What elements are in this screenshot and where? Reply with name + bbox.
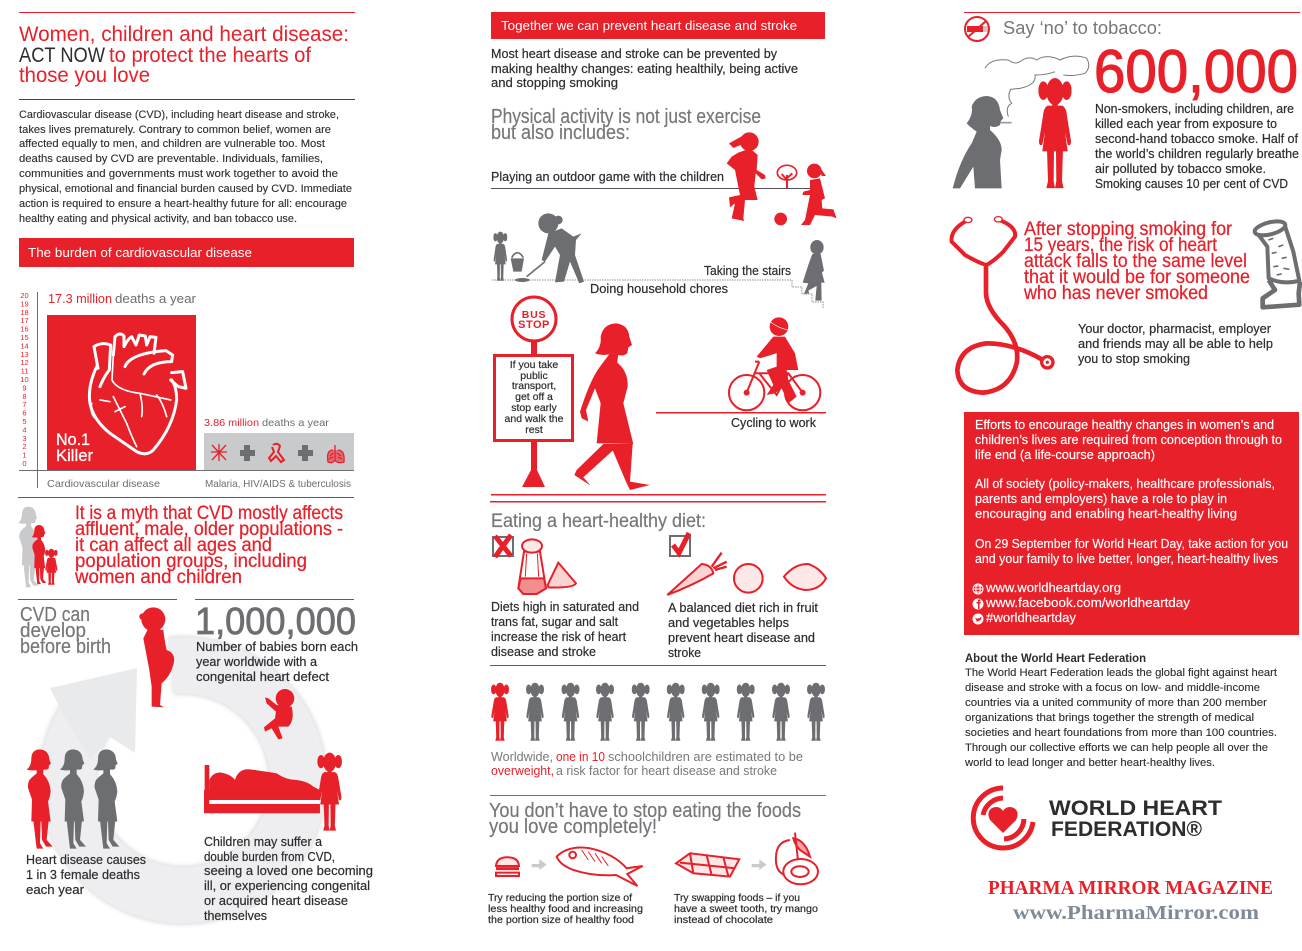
text block: children double burden: ill, or experiencing congenital	[204, 879, 370, 893]
chart axis numbers: 0	[22, 459, 27, 468]
activity: household chores: Doing household chores	[590, 282, 728, 296]
title	[19, 12, 355, 100]
text block: about the World Heart Federation	[964, 653, 1277, 769]
statistic: 1,000,000 babies: 1,000,000	[195, 601, 356, 643]
chart axis numbers: 15	[20, 333, 29, 342]
text block: heart disease causes: each year	[26, 883, 84, 897]
chart axis numbers: 14	[20, 341, 29, 350]
text block: second-hand smoke: air polluted by tobacco smoke.	[1095, 162, 1266, 176]
figures: three women, one in three	[27, 749, 119, 849]
activity: cycling to work: Cycling to work	[731, 416, 817, 430]
statistic: 1,000,000 babies: Number of babies born each	[196, 640, 358, 654]
banner: together we can prevent: Together we can prevent heart disease and stroke	[501, 18, 797, 33]
chart axis numbers: 9	[22, 383, 27, 392]
text block: prevention intro: Most heart disease and stroke can be prevented by	[491, 47, 778, 61]
chart axis numbers: 5	[22, 417, 27, 426]
text block: balanced diet	[668, 601, 819, 660]
callout: after stopping smoking	[1023, 219, 1250, 304]
bar: cardiovascular disease: Killer	[56, 446, 93, 465]
text block: children double burden: or acquired heart disease	[204, 894, 348, 908]
activity: household chores	[492, 213, 792, 296]
text block: swap foods	[674, 892, 818, 926]
text block: about the World Heart Federation: organizations that brings together the strength of medical	[965, 712, 1254, 724]
callout: walk the rest: stop early	[511, 402, 558, 414]
text block: introduction: takes lives prematurely. Contrary to common belief, women are	[19, 124, 331, 136]
icon: bus stop sign: STOP	[518, 319, 550, 331]
chart axis numbers	[20, 291, 29, 468]
icon: plus	[240, 445, 255, 461]
callout: after stopping smoking: 15 years, the risk of heart	[1024, 235, 1218, 256]
text block: overweight schoolchildren: a risk factor for heart disease and stroke	[556, 764, 777, 778]
panel: call to action: children’s lives are required from conception through to	[975, 433, 1282, 447]
panel: middle column	[488, 12, 837, 926]
chart axis numbers: 17	[20, 316, 29, 325]
text block: about the World Heart Federation: disease and stroke with a focus on low- and middle-income	[965, 682, 1260, 694]
icon: bed	[204, 765, 323, 813]
text block: diets high in fat: trans fat, sugar and salt	[491, 615, 618, 629]
text block: ask for help: and friends may all be able to help	[1078, 337, 1273, 351]
text block: diets high in fat: Diets high in saturated and	[491, 600, 639, 614]
icon: second-hand smoke	[953, 56, 1089, 188]
axis labels: Cardiovascular disease	[47, 478, 160, 490]
heading: eating a heart-healthy diet: Eating a heart-healthy diet:	[491, 511, 706, 532]
text block: reduce portions: less healthy food and increasing	[488, 903, 643, 915]
chart axis numbers: 10	[20, 375, 29, 384]
panel: healthy diet	[667, 533, 826, 660]
chart axis numbers: 11	[21, 367, 28, 376]
heading: physical activity: Physical activity is not just exercise	[491, 106, 761, 128]
text block: introduction: affected equally to men, and children are vulnerable too. Most	[19, 138, 325, 150]
callout: walk the rest: get off a	[515, 391, 553, 403]
text block: diets high in fat: increase the risk of heart	[491, 630, 627, 644]
text block: overweight schoolchildren: schoolchildren are estimated to be	[608, 750, 803, 764]
chart axis numbers: 12	[20, 358, 29, 367]
chart axis numbers: 19	[20, 299, 29, 308]
text block: children double burden: double burden from CVD,	[204, 850, 335, 864]
text block: introduction: action is required to ensure a heart-healthy future for all: encourage	[19, 198, 347, 210]
icon: baby	[264, 689, 294, 739]
text block: reduce portions: the portion size of healthy food	[488, 914, 634, 926]
text block: about the World Heart Federation: Through our collective efforts we can help people all over the	[965, 742, 1268, 754]
heading: physical activity: but also includes:	[491, 122, 630, 144]
text block: swap foods: instead of chocolate	[674, 914, 773, 926]
chart axis numbers: 2	[22, 442, 27, 451]
icon: chocolate to mango	[676, 833, 818, 884]
title: Women, children and heart disease:	[19, 23, 349, 46]
chart axis numbers: 20	[20, 291, 29, 300]
chart axis numbers: 3	[22, 434, 27, 443]
banner: the burden of cardiovascular disease	[19, 238, 354, 267]
activity: outdoor game: Playing an outdoor game with the children	[491, 170, 724, 184]
text block: about the World Heart Federation: countries via a united community of more than 200 member	[965, 697, 1267, 709]
activity: cycling to work	[656, 317, 826, 430]
text block: ask for help: you to stop smoking	[1078, 352, 1190, 366]
heading: CVD can develop before birth	[20, 604, 111, 658]
icon: mosquito	[211, 444, 227, 461]
text block: second-hand smoke: the world’s children regularly breathe	[1095, 147, 1299, 161]
callout: CVD myth	[74, 503, 343, 588]
text block: reduce portions	[488, 892, 643, 926]
heading: CVD can develop before birth: CVD can	[20, 604, 90, 626]
text block: about the World Heart Federation: societies and heart foundations from more than 100 countries.	[965, 727, 1277, 739]
callout: walk the rest: and walk the	[505, 413, 564, 425]
text block: swap foods: Try swapping foods – if you	[674, 892, 800, 904]
icon: family silhouette	[18, 507, 58, 587]
chart axis numbers: 7	[22, 400, 27, 409]
callout: CVD myth: women and children	[74, 567, 242, 588]
bar: malaria, HIV/AIDS and tuberculosis	[204, 417, 354, 470]
panel: call to action: #worldheartday	[986, 611, 1077, 625]
text block: second-hand smoke: killed each year from exposure to	[1095, 117, 1277, 131]
icon: globe	[973, 584, 983, 594]
icon: walking woman	[574, 323, 650, 490]
activity: outdoor game	[491, 132, 837, 225]
tip: swapping foods	[674, 833, 818, 926]
text block: about the World Heart Federation: The World Heart Federation leads the global fight against heart	[965, 667, 1277, 679]
icon: cross in box	[493, 535, 513, 557]
callout: after stopping smoking: who has never smoked	[1023, 283, 1208, 304]
heading: CVD can develop before birth: develop	[20, 620, 86, 642]
text block: balanced diet: prevent heart disease and	[668, 631, 815, 645]
chart axis numbers: 4	[22, 425, 27, 434]
icon: woman sweeping with child and bucket	[493, 213, 584, 283]
icon: stethoscope	[952, 217, 1053, 393]
text block: heart disease causes: Heart disease causes	[26, 853, 146, 867]
panel: call to action: encouraging and enabling heart-healthy living	[975, 507, 1237, 521]
text block: overweight schoolchildren	[491, 750, 803, 778]
panel: left column	[18, 12, 373, 923]
callout: after stopping smoking: that it would be for someone	[1024, 267, 1250, 288]
icon: pregnant woman	[139, 607, 174, 707]
icon: bus stop sign: BUS	[522, 309, 546, 321]
bar: cardiovascular disease: No.1	[56, 430, 90, 449]
text block: heart disease causes: 1 in 3 female deaths	[26, 868, 140, 882]
callout: CVD myth: population groups, including	[75, 551, 307, 572]
icon: twitter	[972, 614, 984, 624]
panel: call to action	[964, 412, 1299, 635]
icon: no smoking	[965, 17, 989, 41]
icon: anatomical heart	[89, 334, 186, 454]
panel: call to action: parents and employers) have a role to play in	[975, 492, 1227, 506]
text block: children double burden	[204, 835, 373, 923]
text block: balanced diet: A balanced diet rich in fruit	[668, 601, 819, 615]
text block: diets high in fat: disease and stroke	[491, 645, 596, 659]
chart axis numbers: 13	[20, 350, 29, 359]
callout: after stopping smoking: attack falls to the same level	[1024, 251, 1247, 272]
icon: stubbed cigarette	[1253, 219, 1300, 307]
text block: about the World Heart Federation: world to lead longer and better heart-healthy lives.	[964, 757, 1215, 769]
text block: swap foods: have a sweet tooth, try mango	[674, 903, 818, 915]
icon: carrot, orange and lemon	[667, 553, 826, 595]
panel: call to action: www.worldheartday.org	[985, 581, 1121, 595]
text block: second-hand smoke: Smoking causes 10 per cent of CVD	[1095, 177, 1288, 191]
text block: balanced diet: stroke	[668, 646, 701, 660]
heading: physical activity	[491, 106, 761, 144]
text block: prevention intro: and stopping smoking	[491, 76, 618, 90]
text block: second-hand smoke	[1095, 102, 1299, 191]
callout: CVD myth: affluent, male, older populations -	[75, 519, 343, 540]
icon: AIDS ribbon	[269, 444, 284, 462]
heading: foods you love: You don’t have to stop eating the foods	[489, 800, 801, 822]
text block: introduction: Cardiovascular disease (CVD), including heart disease and stroke,	[19, 109, 339, 121]
bar chart: deaths per year	[19, 291, 354, 490]
bar: cardiovascular disease: deaths a year	[115, 291, 197, 306]
logo: World Heart Federation: FEDERATION®	[1051, 818, 1203, 841]
icon: bus stop sign	[494, 297, 572, 487]
panel: call to action: life end (a life-course approach)	[975, 448, 1155, 462]
bar: malaria, HIV/AIDS and tuberculosis: 3.86 million	[204, 417, 259, 429]
title: ACT NOW	[19, 44, 105, 67]
icon: woman climbing stairs	[803, 240, 825, 301]
text block: prevention intro: making healthy changes: eating healthily, being active	[491, 62, 798, 76]
text block: children double burden: themselves	[204, 909, 267, 923]
panel: call to action: www.facebook.com/worldheartday	[985, 596, 1191, 610]
heading: foods you love	[489, 800, 801, 838]
bar: cardiovascular disease	[47, 291, 197, 470]
icon: facebook	[972, 598, 984, 610]
credit: Pharma Mirror Magazine: www.PharmaMirror.com	[1013, 902, 1259, 924]
callout: walk the rest: public	[520, 370, 548, 382]
callout: walk the rest	[505, 359, 564, 436]
chart axis numbers: 1	[22, 451, 27, 460]
banner: together we can prevent	[491, 12, 825, 39]
activity: taking the stairs	[704, 240, 825, 308]
title: those you love	[19, 64, 150, 87]
icon: lungs	[328, 445, 344, 463]
statistic: 1,000,000 babies: congenital heart defect	[196, 670, 330, 684]
heading: say no to tobacco: Say ‘no’ to tobacco:	[1003, 17, 1162, 38]
callout: walk the rest: If you take	[510, 359, 558, 371]
text block: second-hand smoke: second-hand tobacco smoke. Half of	[1095, 132, 1299, 146]
callout: walk the rest: rest	[525, 424, 543, 436]
icon: burger to fish	[496, 848, 643, 886]
heading: CVD can develop before birth: before birth	[20, 636, 111, 658]
text block: overweight schoolchildren: overweight,	[491, 764, 554, 778]
icon: tick in box	[670, 533, 690, 556]
text block: diets high in fat	[491, 600, 639, 659]
icon: running woman, tree, ball and child	[727, 132, 837, 225]
text block: ask for help: Your doctor, pharmacist, employer	[1078, 322, 1271, 336]
chart axis numbers: 16	[20, 325, 29, 334]
heading: foods you love: you love completely!	[489, 816, 657, 838]
credit: Pharma Mirror Magazine	[988, 877, 1273, 924]
callout: after stopping smoking: After stopping smoking for	[1024, 219, 1233, 240]
chart axis numbers: 18	[20, 308, 29, 317]
text block: introduction: communities and governments must work together to avoid the	[19, 168, 338, 180]
credit: Pharma Mirror Magazine: PHARMA MIRROR MAGAZINE	[988, 877, 1273, 899]
icon: plus	[298, 445, 313, 461]
panel: call to action: All of society (policy-makers, healthcare professionals,	[975, 477, 1275, 491]
text block: balanced diet: and vegetables helps	[668, 616, 789, 630]
text block: introduction: physical, emotional and financial burden caused by CVD. Immediate	[19, 183, 352, 195]
icon: woman on bicycle	[729, 317, 820, 410]
panel: call to action: Efforts to encourage healthy changes in women’s and	[975, 418, 1274, 432]
logo: World Heart Federation	[973, 788, 1222, 848]
text block: reduce portions: Try reducing the portion size of	[488, 892, 632, 904]
panel: call to action: On 29 September for World Heart Day, take action for you	[975, 537, 1288, 551]
axis labels	[47, 478, 351, 490]
text block: overweight schoolchildren: Worldwide,	[491, 750, 553, 764]
axis labels: Malaria, HIV/AIDS & tuberculosis	[205, 478, 351, 490]
activity: taking the stairs: Taking the stairs	[704, 264, 791, 278]
text block: heart disease causes	[26, 853, 146, 897]
logo: World Heart Federation: WORLD HEART	[1049, 797, 1222, 820]
arrow: life-course cycle	[50, 665, 298, 895]
bar: cardiovascular disease: 17.3 million	[48, 291, 112, 306]
text block: introduction: healthy eating and physical activity, and ban tobacco use.	[19, 213, 297, 225]
icon: standing girl	[317, 753, 342, 831]
tip: portion size	[488, 848, 643, 926]
text block: children double burden: seeing a loved one becoming	[204, 864, 373, 878]
title: to protect the hearts of	[109, 44, 311, 67]
callout: CVD myth: it can affect all ages and	[75, 535, 272, 556]
icon: salt shaker and salt	[518, 539, 576, 594]
text block: ask for help	[1078, 322, 1273, 366]
callout: CVD myth: It is a myth that CVD mostly affects	[75, 503, 343, 524]
statistic: 1,000,000 babies	[195, 601, 358, 684]
panel: right column	[952, 12, 1300, 924]
callout: walk the rest: transport,	[512, 380, 556, 392]
text block: overweight schoolchildren: one in 10	[556, 750, 605, 764]
text block: second-hand smoke: Non-smokers, including children, are	[1095, 102, 1294, 116]
chart axis numbers: 6	[22, 409, 27, 418]
text block: introduction	[19, 109, 352, 225]
bar: malaria, HIV/AIDS and tuberculosis: deaths a year	[262, 417, 330, 429]
text block: about the World Heart Federation: About the World Heart Federation	[965, 653, 1146, 665]
text block: children double burden: Children may suffer a	[204, 835, 322, 849]
chart axis numbers: 8	[22, 392, 27, 401]
figures: pregnant woman, baby, bed and child	[139, 607, 342, 831]
pictogram: one in ten schoolchildren	[491, 683, 825, 741]
panel: call to action: and your family to live better, longer, heart-healthy lives	[975, 552, 1278, 566]
text block: introduction: deaths caused by CVD are preventable. Individuals, families,	[19, 153, 323, 165]
panel: unhealthy diet	[491, 535, 639, 659]
banner: the burden of cardiovascular disease: The burden of cardiovascular disease	[28, 245, 252, 260]
text block: prevention intro	[491, 47, 798, 90]
statistic: 1,000,000 babies: year worldwide with a	[196, 655, 317, 669]
